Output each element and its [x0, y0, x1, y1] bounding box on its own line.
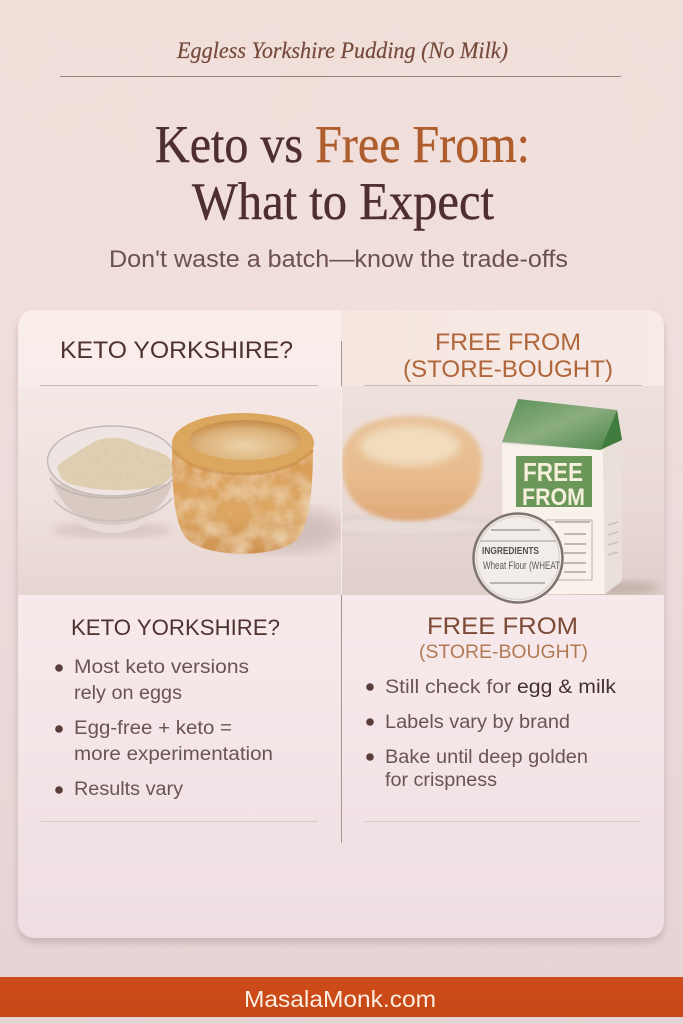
icon: blurred pudding on plate [342, 414, 484, 524]
keto bullet list: rely on eggs [74, 683, 182, 704]
free from lower heading [419, 613, 588, 663]
free from top heading: (STORE-BOUGHT) [403, 356, 613, 383]
free from bullet list: for crispness [385, 770, 497, 791]
keto bullet list: Most keto versions [74, 657, 249, 678]
panel: keto photo [18, 413, 341, 595]
free from bullet list [366, 677, 617, 791]
footer website text: MasalaMonk.com [244, 986, 436, 1012]
keto top heading: KETO YORKSHIRE? [60, 337, 293, 364]
eyebrow heading: Eggless Yorkshire Pudding (No Milk) [176, 38, 508, 63]
keto bullet list [55, 657, 273, 800]
keto lower heading: KETO YORKSHIRE? [71, 615, 280, 640]
icon: magnifier over ingredients: INGREDIENTS [482, 546, 539, 557]
carton label [516, 456, 592, 511]
keto bullet list: more experimentation [74, 744, 273, 765]
free from bullet list: Still check for egg & milk [385, 677, 617, 698]
icon: free from carton [502, 399, 622, 594]
column: keto yorkshire [40, 337, 318, 822]
carton label: FREE [523, 457, 583, 487]
free from lower heading: FREE FROM [427, 613, 578, 640]
panel: free from photo [315, 386, 664, 596]
title: What to Expect [192, 173, 494, 231]
free from lower heading: (STORE-BOUGHT) [419, 642, 588, 663]
cast shadow of carton [570, 580, 660, 596]
footer band [0, 977, 683, 1017]
free from top heading: FREE FROM [435, 329, 581, 356]
keto bullet list: Egg-free + keto = [74, 718, 232, 739]
title [155, 116, 530, 231]
carton label: FROM [522, 484, 585, 511]
title: Keto vs Free From: [155, 116, 530, 174]
icon: magnifier over ingredients: Wheat Flour (WHEAT [483, 560, 560, 572]
cast shadow under keto items [256, 505, 341, 556]
icon: glass bowl of flour [48, 426, 177, 538]
free from bullet list: Labels vary by brand [385, 712, 570, 733]
comparison panel [18, 310, 664, 942]
icon: keto yorkshire pudding [172, 413, 314, 554]
keto bullet list: Results vary [74, 779, 184, 800]
icon: magnifier over ingredients [474, 514, 562, 602]
free from bullet list: Bake until deep golden [385, 747, 588, 768]
free from top heading [403, 329, 613, 383]
subtitle: Don't waste a batch—know the trade-offs [109, 246, 568, 273]
column: free from [364, 329, 642, 822]
